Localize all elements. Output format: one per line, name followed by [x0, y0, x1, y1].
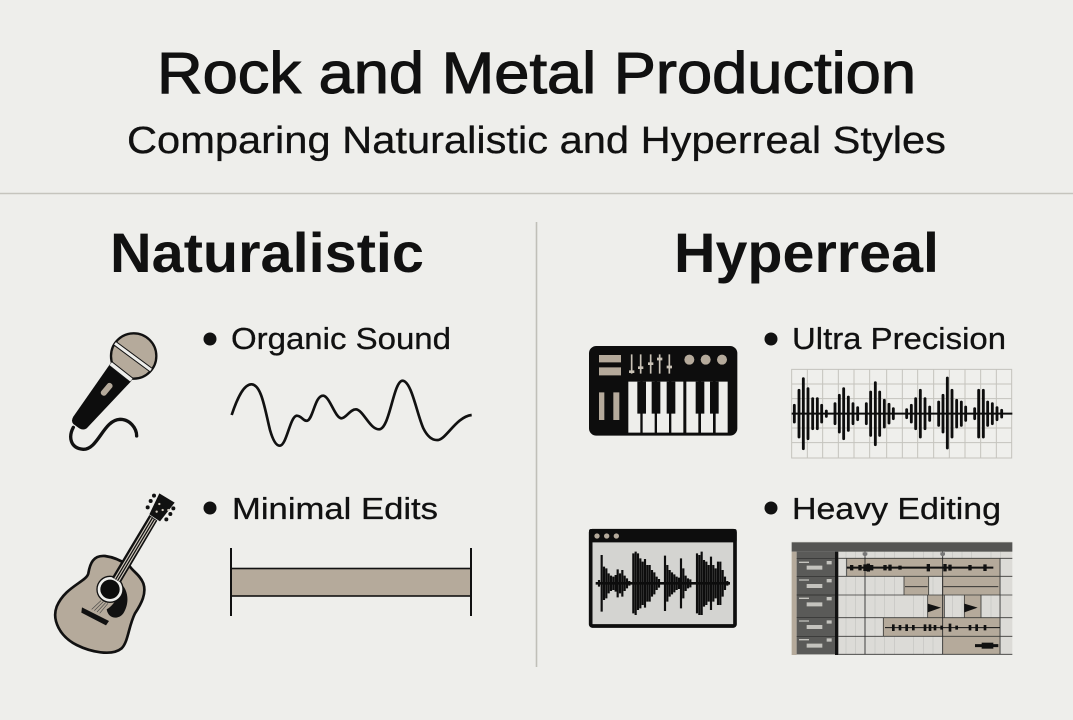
organic waveform: [232, 381, 472, 446]
icon: midi keyboard: [589, 346, 737, 436]
precision waveform on grid: [792, 369, 1012, 458]
daw screenshot: [792, 542, 1012, 655]
bullet: minimal edits: Minimal Edits: [232, 491, 438, 526]
subtitle: Comparing Naturalistic and Hyperreal Styles: [127, 120, 946, 162]
icon: audio window: [589, 529, 737, 626]
icon: acoustic guitar: [55, 493, 175, 653]
panel: hyperreal: [589, 221, 1012, 655]
heading: hyperreal: Hyperreal: [674, 221, 939, 284]
bullet: heavy editing: Heavy Editing: [792, 491, 1001, 526]
heading: naturalistic: Naturalistic: [110, 221, 424, 284]
bullet: organic sound: Organic Sound: [231, 321, 451, 356]
title: Rock and Metal Production: [157, 41, 916, 106]
bullet: ultra precision: Ultra Precision: [792, 321, 1006, 356]
icon: microphone: [71, 333, 156, 449]
daw clips: [847, 558, 1000, 654]
panel: naturalistic: [55, 221, 472, 653]
timeline bar: [231, 548, 471, 616]
